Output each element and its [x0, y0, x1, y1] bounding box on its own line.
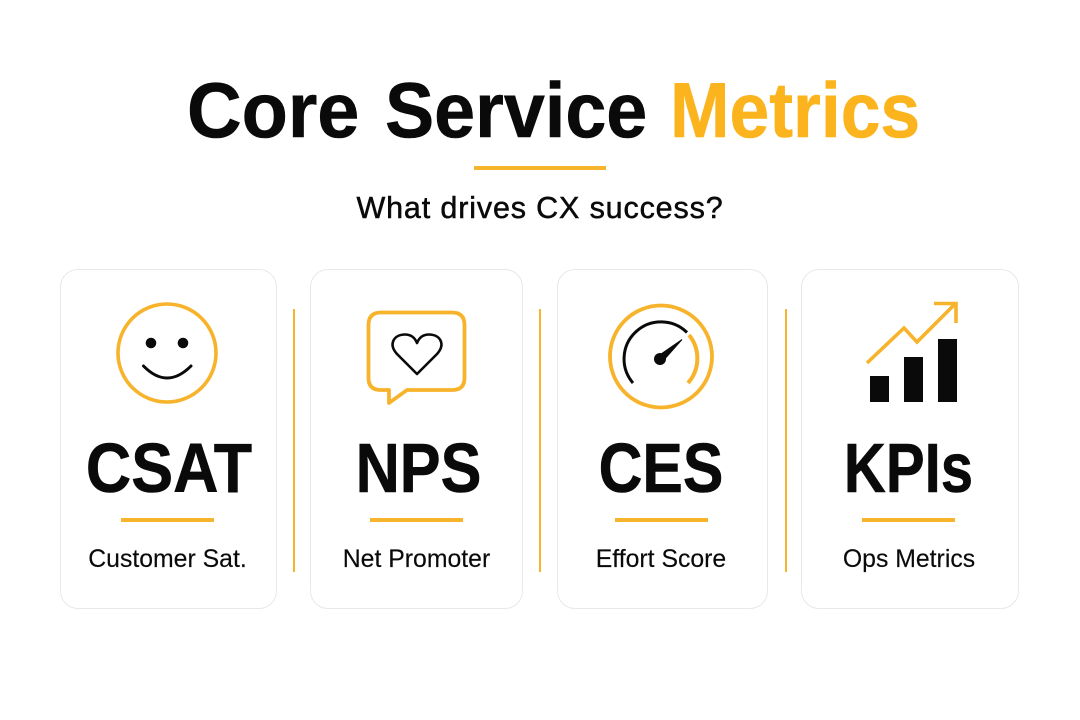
label: Ops Metrics: Ops Metrics	[843, 546, 975, 573]
title underline	[474, 166, 606, 170]
CSAT rule	[121, 518, 214, 522]
label: Effort Score: Effort Score	[596, 546, 726, 573]
title	[187, 66, 920, 154]
NPS rule	[370, 518, 463, 522]
icon: smiley face	[116, 302, 218, 404]
heading: CSAT: CSAT	[86, 429, 252, 507]
panel: NPS	[310, 269, 523, 609]
separator	[785, 309, 787, 572]
title: Service	[385, 66, 647, 154]
heading: NPS: NPS	[356, 429, 481, 507]
label: Customer Sat.: Customer Sat.	[88, 546, 247, 573]
panel: CES	[557, 269, 768, 609]
KPIs rule	[862, 518, 955, 522]
heading: KPIs: KPIs	[844, 429, 973, 507]
CES rule	[615, 518, 708, 522]
icon: speech bubble heart	[366, 310, 466, 405]
heading: CES: CES	[599, 429, 723, 507]
separator	[539, 309, 541, 572]
panel: CSAT	[60, 269, 277, 609]
title: Core	[187, 66, 359, 154]
panel: KPIs	[801, 269, 1019, 609]
icon: bar chart with rising arrow	[866, 302, 958, 402]
subtitle: What drives CX success?	[356, 191, 724, 225]
label: Net Promoter: Net Promoter	[343, 546, 490, 573]
icon: speedometer gauge	[608, 304, 714, 410]
separator	[293, 309, 295, 572]
title: Metrics	[670, 66, 920, 154]
